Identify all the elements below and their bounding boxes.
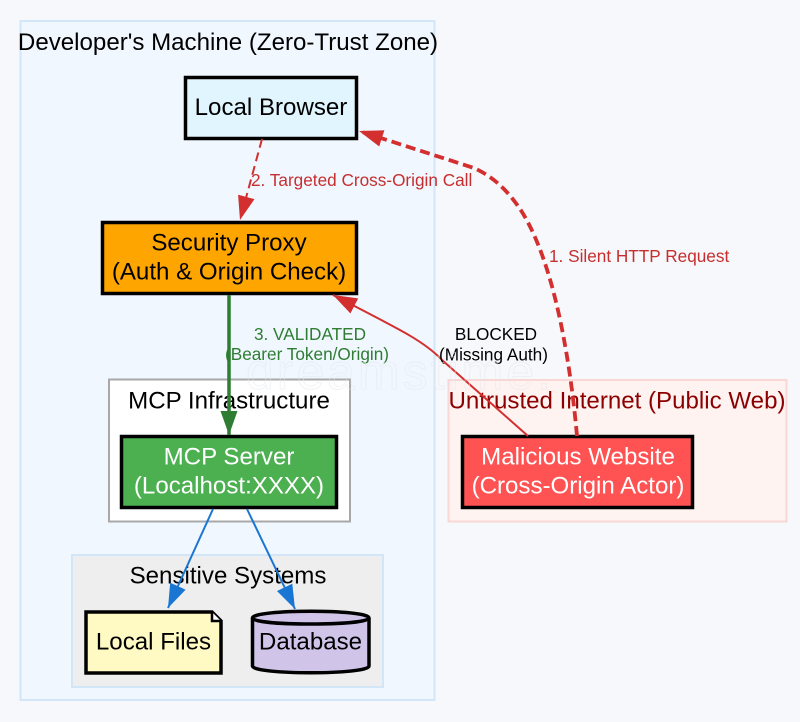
label: validated: 3. VALIDATED [254,324,366,344]
label: blocked [439,324,548,364]
arrow: targeted cross-origin call [240,139,262,220]
arrow: blocked request [333,295,528,436]
node: mcp server: MCP Server [164,444,294,470]
panel: mcp infrastructure [109,380,350,522]
node: local browser: Local Browser [195,94,347,121]
node: local files: Local Files [96,628,211,656]
node: security proxy: Security Proxy [151,230,307,256]
node: database [252,611,369,673]
node: database: Database [259,628,362,656]
heading: mcp infrastructure: MCP Infrastructure [128,388,330,414]
panel: sensitive systems [72,555,383,687]
arrow: server to database [247,509,295,609]
node: malicious website [462,436,692,508]
node: local files [86,612,221,673]
node: mcp server [122,436,336,508]
panel: untrusted internet [448,380,786,522]
label: silent http request: 1. Silent HTTP Request [549,246,729,266]
heading: developer's machine: Developer's Machine (Zero-Trust Zone) [18,29,438,56]
node: local browser [186,78,356,138]
node: malicious website: (Cross-Origin Actor) [472,472,684,500]
node: security proxy [102,222,356,294]
arrow: validated [227,295,231,435]
heading: sensitive systems: Sensitive Systems [130,562,326,590]
label: targeted cross-origin call: 2. Targeted Cross-Origin Call [251,170,472,190]
label: blocked: (Missing Auth) [439,344,548,364]
node: mcp server: (Localhost:XXXX) [134,472,324,500]
node: security proxy: (Auth & Origin Check) [112,258,346,286]
arrow: server to local files [168,509,213,608]
label: validated [225,324,389,364]
heading: untrusted internet: Untrusted Internet (Public Web) [448,388,786,414]
node: malicious website: Malicious Website [481,444,675,470]
arrow: silent http request [359,131,577,436]
watermark: dreamstime. [246,344,551,400]
label: validated: (Bearer Token/Origin) [225,344,389,364]
label: blocked: BLOCKED [455,324,537,344]
